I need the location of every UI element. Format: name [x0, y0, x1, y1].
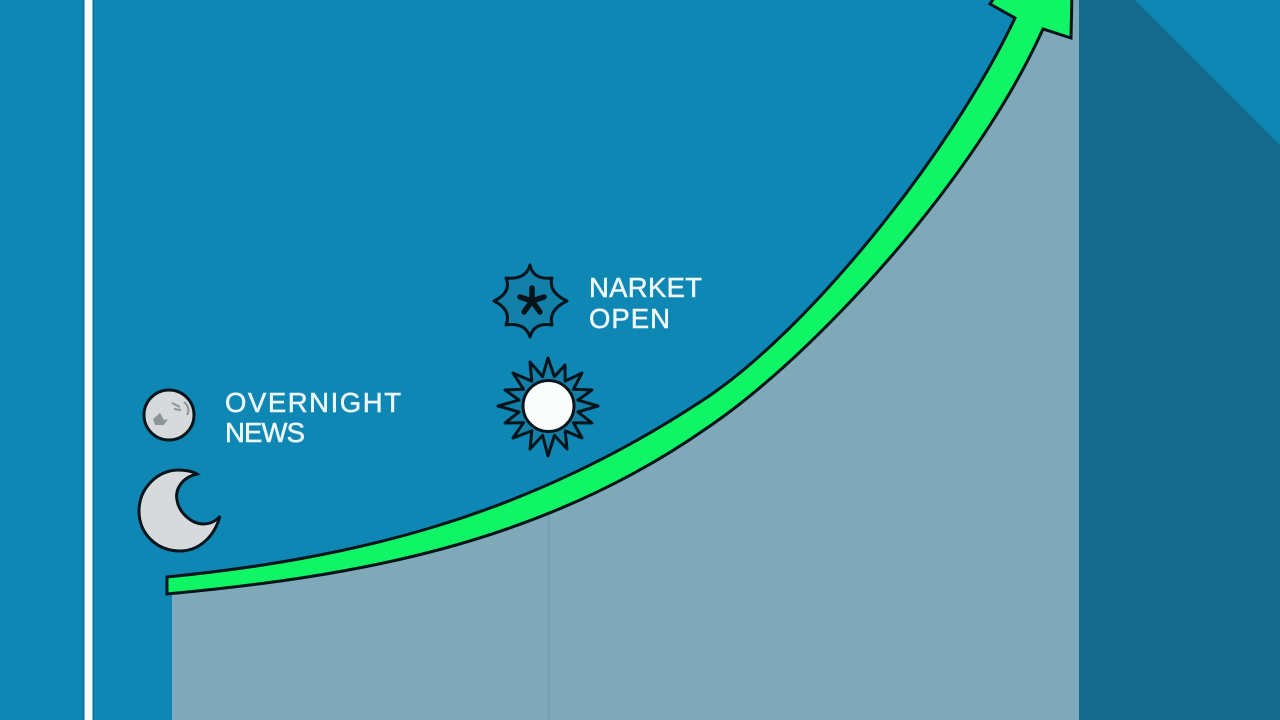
label: overnight news: OVERNIGHT: [225, 387, 401, 418]
label: market open: OPEN: [589, 303, 670, 334]
label: market open: NARKET: [589, 272, 702, 303]
label: overnight news: NEWS: [225, 417, 305, 448]
grey area under the growth curve: [167, 0, 1079, 720]
market open divider line: [548, 513, 550, 720]
dark shadow panel at right: [1079, 0, 1280, 720]
white vertical axis line: [83, 0, 94, 720]
icon: crescent moon: [139, 470, 220, 551]
label: overnight news: [225, 387, 401, 448]
label: market open: [589, 272, 702, 334]
icon: sun: [498, 358, 598, 456]
green growth arrow: [167, 0, 1072, 594]
icon: star badge: [494, 265, 567, 337]
icon: full moon: [144, 390, 194, 440]
